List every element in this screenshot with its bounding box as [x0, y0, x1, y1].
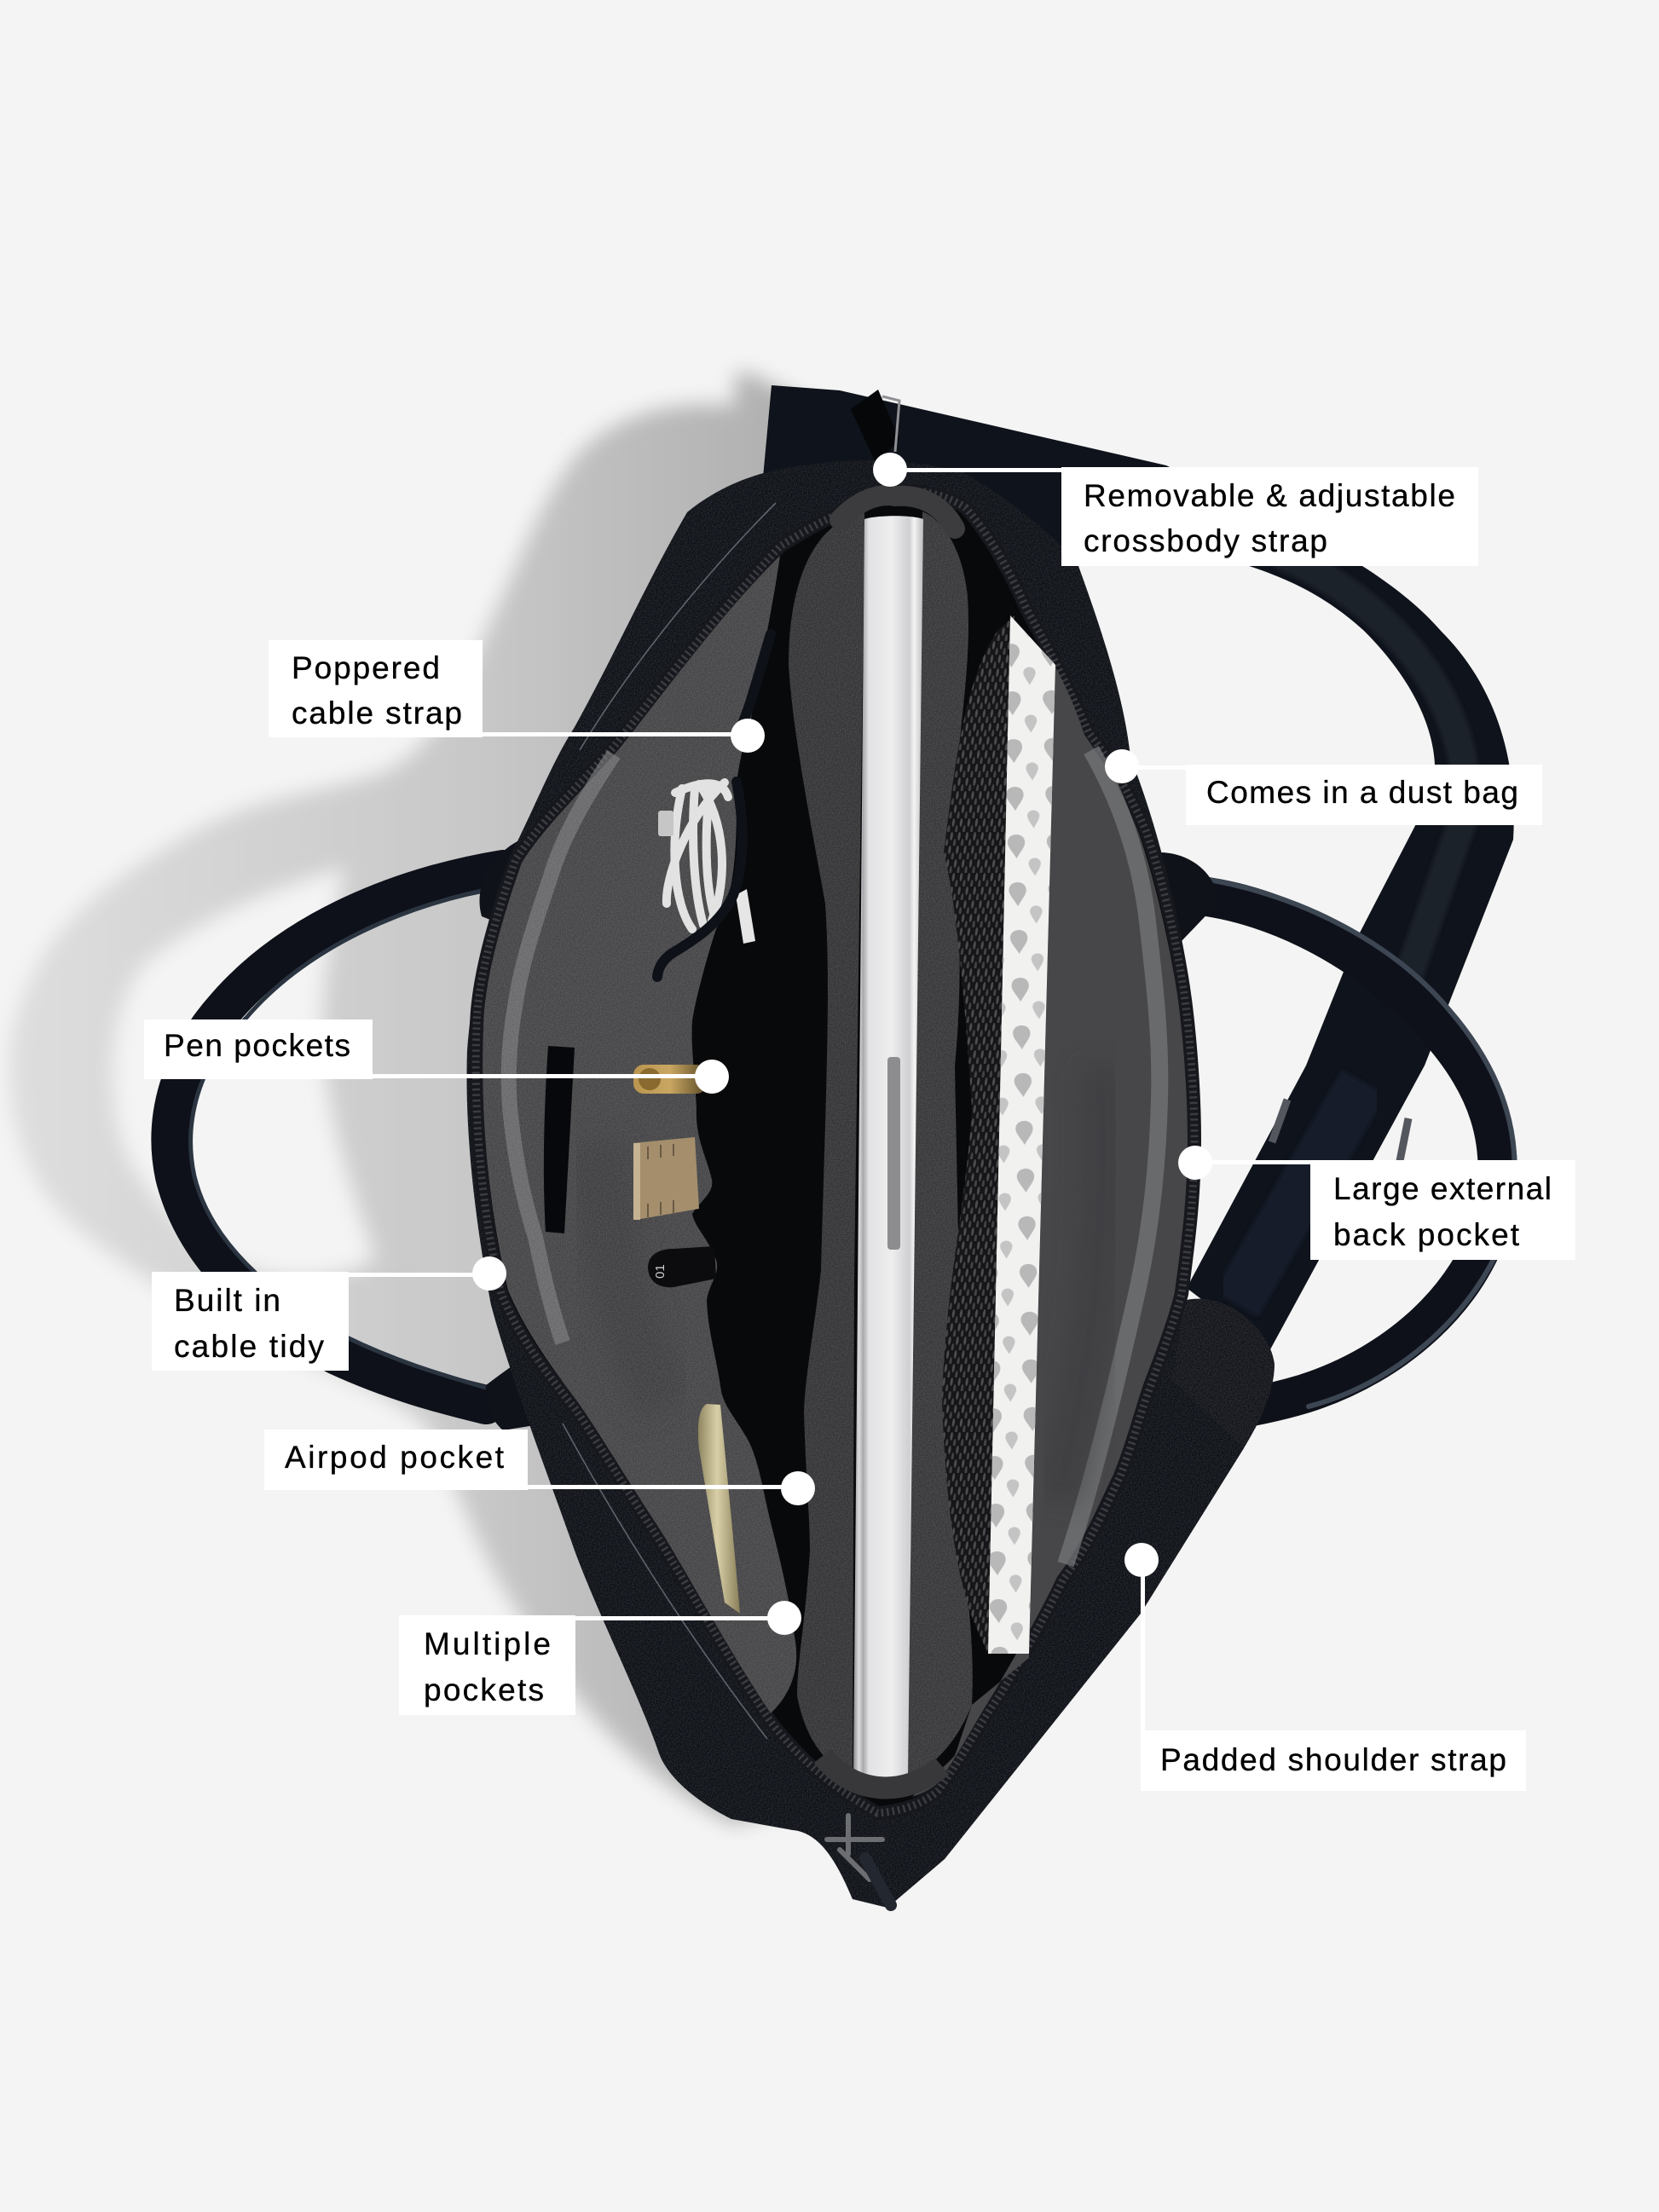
callout: multiple pockets: pockets [424, 1672, 544, 1707]
brass padlock [633, 1065, 707, 1094]
callout: pen pockets [144, 1019, 729, 1094]
callout: removable strap: crossbody strap [1084, 523, 1327, 558]
bag interior cavity and zip [476, 491, 1194, 1813]
shoulder pad [1159, 1299, 1275, 1466]
notebook [942, 615, 1055, 1654]
callout: large external back pocket: Large external [1333, 1171, 1552, 1206]
laptop notch [887, 1057, 900, 1250]
cast shadow of the bag [9, 373, 853, 1824]
mesh band [509, 754, 614, 1343]
callout: dust bag: Comes in a dust bag [1206, 775, 1518, 810]
left interior lining [483, 556, 796, 1713]
right interior lining [912, 627, 1188, 1797]
leather strap [657, 634, 771, 977]
callout: built in cable tidy: cable tidy [174, 1329, 324, 1364]
white cable loops [667, 783, 728, 929]
combination lock: 01 [653, 1264, 668, 1279]
pen pocket slot [544, 1046, 575, 1233]
callout: poppered cable strap: Poppered [292, 650, 440, 685]
callout: multiple pockets [399, 1601, 801, 1715]
bag exterior leather [466, 460, 1275, 1908]
callout: multiple pockets: Multiple [424, 1626, 551, 1661]
gold phone [698, 1404, 740, 1614]
right carry handle [1159, 852, 1515, 1415]
left handle anchors [479, 837, 546, 1430]
callout: dust bag [1105, 749, 1542, 825]
callout: removable strap [873, 453, 1478, 566]
usb plug [736, 889, 755, 944]
left felt sleeve [789, 511, 864, 1782]
left carry handle [171, 837, 546, 1430]
callout: pen pockets: Pen pockets [164, 1028, 350, 1063]
felt bottom gather [823, 1756, 942, 1788]
felt top gather [840, 495, 955, 528]
callout: poppered cable strap [269, 640, 765, 753]
callout: airpod pocket [264, 1429, 815, 1505]
strap adjuster buckle [1272, 1100, 1408, 1161]
callout: large external back pocket [1178, 1146, 1575, 1260]
callout: removable strap: Removable & adjustable [1084, 478, 1455, 513]
combination lock [648, 1246, 716, 1287]
laptop [853, 516, 923, 1780]
callout: padded shoulder strap [1124, 1543, 1526, 1791]
callout: padded shoulder strap: Padded shoulder strap [1160, 1742, 1506, 1777]
right handle anchor [1159, 852, 1217, 942]
lightning connector [658, 811, 673, 836]
callout: large external back pocket: back pocket [1333, 1217, 1520, 1252]
cable strap and white cable [657, 634, 771, 977]
wooden ruler [633, 1137, 699, 1220]
right felt sleeve [905, 511, 973, 1780]
callout: built in cable tidy: Built in [174, 1283, 280, 1318]
callout: built in cable tidy [152, 1256, 506, 1371]
callout: airpod pocket: Airpod pocket [285, 1440, 505, 1475]
top zip puller [851, 390, 899, 465]
mesh band right [1066, 750, 1159, 1564]
callout: poppered cable strap: cable strap [292, 696, 462, 731]
bottom zip pullers [827, 1816, 891, 1905]
crossbody strap [763, 385, 1514, 1351]
